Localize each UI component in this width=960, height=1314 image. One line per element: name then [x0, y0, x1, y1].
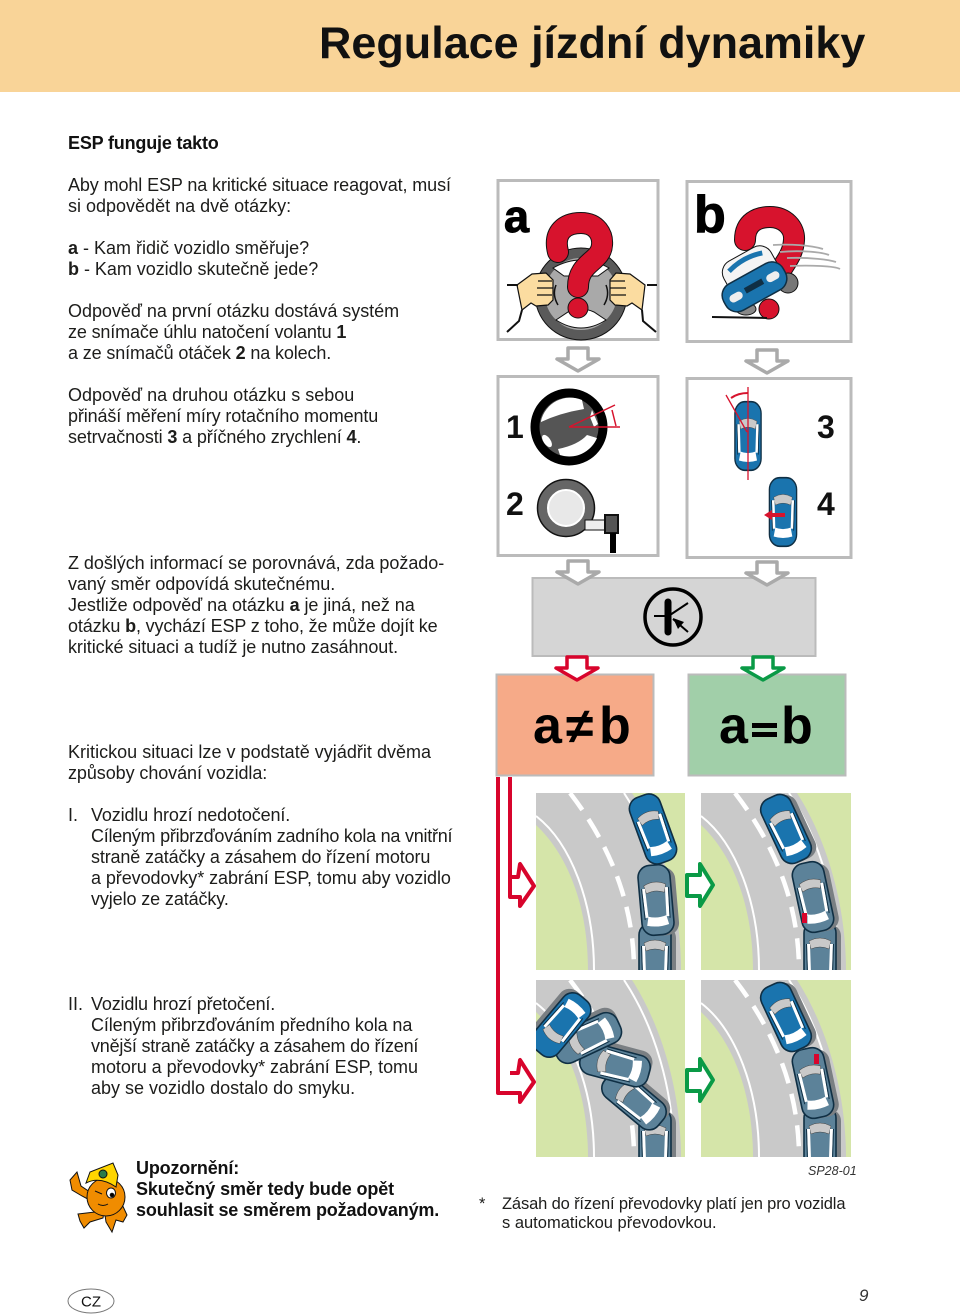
- footnote asterisk: *: [479, 1195, 485, 1213]
- panel: sensors 3 and 4: [687, 378, 851, 558]
- transistor symbol: [645, 589, 701, 645]
- road scene: oversteer without ESP: [536, 980, 685, 1157]
- letter b: b: [694, 186, 726, 244]
- section heading: ESP funguje takto: [68, 133, 219, 153]
- questions a and b: a - Kam řidič vozidlo směřuje? b - Kam vozidlo skutečně jede?: [68, 238, 318, 279]
- footnote: Zásah do řízení převodovky platí jen pro vozidla s automatickou převodovkou.: [502, 1195, 845, 1232]
- number 4: 4: [817, 486, 835, 522]
- car with lateral acceleration: [764, 478, 797, 546]
- second answer text: Odpověď na druhou otázku s sebou přináší měření míry rotačního momentu setrvačnosti 3 a příčného zrychlení 4.: [68, 385, 378, 447]
- red arrow to mismatch: [556, 657, 598, 680]
- warning note: Upozornění: Skutečný směr tedy bude opět souhlasit se směrem požadovaným.: [136, 1158, 439, 1220]
- first answer text: Odpověď na první otázku dostává systém ze snímače úhlu natočení volantu 1 a ze snímačů otáček 2 na kolech.: [68, 301, 399, 363]
- case I description: Vozidlu hrozí nedotočení. Cíleným přibrzďováním zadního kola na vnitřní straně zatáčky a zásahem do řízení motoru a převodovky* zabrání ESP, tomu aby vozidlo vyjelo ze zatáčky.: [91, 805, 452, 909]
- header band with title: [0, 0, 960, 92]
- steering wheel: [535, 248, 627, 340]
- result box a not equal b: [496, 674, 654, 776]
- green arrow case II: [687, 1059, 713, 1101]
- wheel speed sensor: [538, 480, 618, 553]
- red connector to case I: [510, 777, 534, 906]
- red connector to case II: [498, 777, 534, 1102]
- number 2: 2: [506, 486, 524, 522]
- question mark: [745, 217, 794, 319]
- country badge: CZ: [81, 1294, 101, 1310]
- figure code: SP28-01: [808, 1164, 857, 1178]
- control unit box: [532, 578, 816, 656]
- icon: mascot: [70, 1163, 127, 1232]
- skidding car: [717, 241, 798, 316]
- intro text: Aby mohl ESP na kritické situace reagovat, musí si odpovědět na dvě otázky:: [68, 175, 451, 216]
- panel b: vehicle actual direction: [687, 182, 851, 342]
- result box a equals b: a: [719, 697, 749, 755]
- arrows from question panels: [557, 348, 788, 373]
- result box a not equal b: a: [533, 697, 563, 755]
- road scene: oversteer with ESP: [701, 980, 851, 1157]
- road scene: understeer without ESP: [536, 793, 685, 970]
- case II description: Vozidlu hrozí přetočení. Cíleným přibrzďováním předního kola na vnější straně zatáčky a zásahem do řízení motoru a převodovky* zabrání ESP, tomu aby se vozidlo dostalo do smyku.: [91, 994, 418, 1098]
- number 1: 1: [506, 409, 524, 445]
- critical situations intro: Kritickou situaci lze v podstatě vyjádřit dvěma způsoby chování vozidla:: [68, 742, 431, 783]
- result box a not equal b: ≠: [566, 698, 593, 754]
- page number: 9: [859, 1286, 868, 1305]
- steering wheel sensor: [535, 393, 620, 461]
- ground line: [712, 317, 767, 318]
- hands on wheel: [507, 273, 657, 332]
- country badge: [68, 1289, 114, 1313]
- case II number: II.: [68, 994, 83, 1014]
- panel a: driver intent: [498, 180, 658, 340]
- panel: sensors 1 and 2: [498, 376, 658, 556]
- result box a not equal b: b: [599, 697, 631, 755]
- number 3: 3: [817, 409, 835, 445]
- comparison text: Z došlých informací se porovnává, zda požado- vaný směr odpovídá skutečnému. Jestliže odpověď na otázku a je jiná, než na otázku b, vychází ESP z toho, že může dojít ke kritické situaci a tudíž je nutno zasáhnout.: [68, 553, 444, 657]
- road scene: understeer with ESP: [701, 793, 851, 970]
- car with yaw rate: [726, 387, 761, 480]
- question mark: [557, 223, 602, 318]
- result box a equals b: [688, 674, 846, 776]
- speed lines: [773, 245, 840, 269]
- case I number: I.: [68, 805, 78, 825]
- letter a: a: [504, 191, 530, 242]
- title: Regulace jízdní dynamiky: [319, 17, 865, 68]
- green arrow to match: [742, 657, 784, 680]
- arrows into control unit: [557, 561, 788, 585]
- result box a equals b: b: [781, 697, 813, 755]
- green arrow case I: [687, 864, 713, 906]
